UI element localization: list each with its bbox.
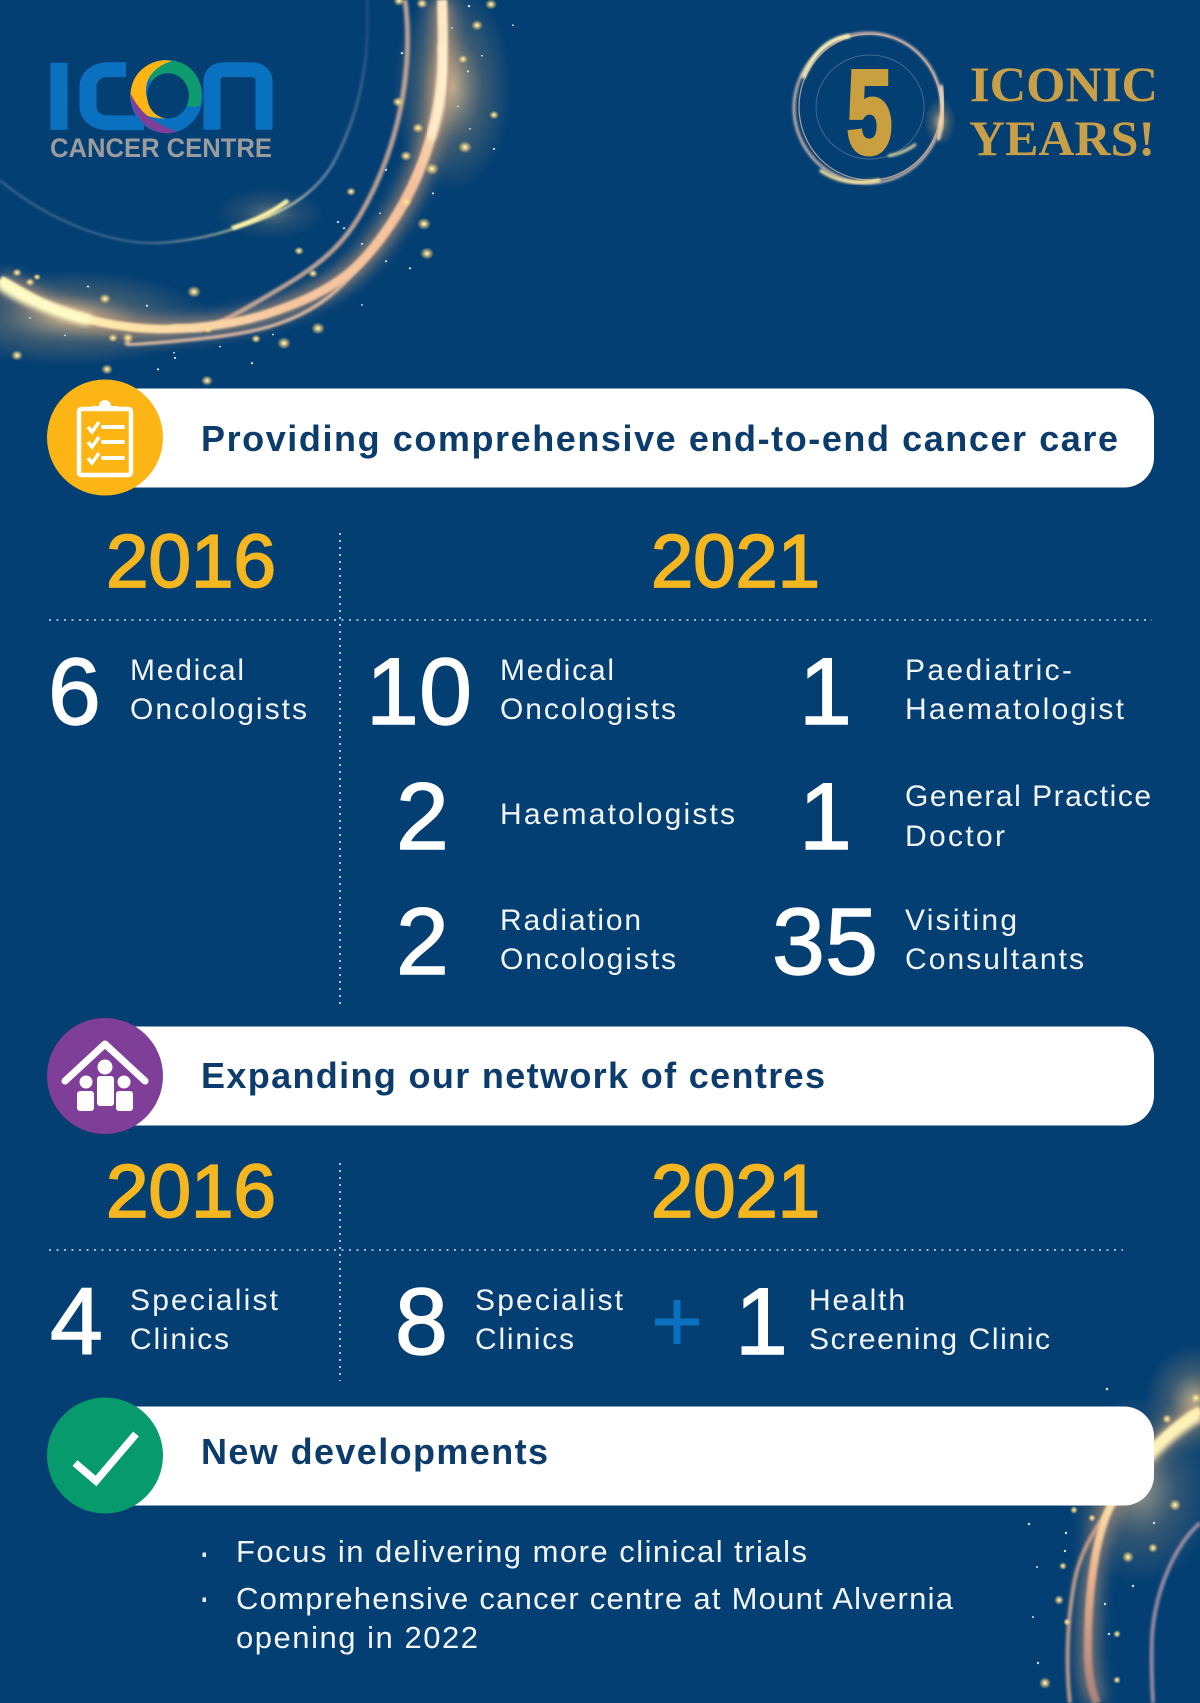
stat: 1 paediatric-haematologist: 1 [799, 639, 852, 745]
logo caption: CANCER CENTRE [50, 133, 272, 163]
section 2 header [47, 1018, 1154, 1134]
stat: 8 specialist clinics: Clinics [475, 1323, 574, 1356]
bullet 1: Focus in delivering more clinical trials [236, 1534, 807, 1569]
year 2021: 2021 [651, 519, 820, 603]
stat: 10 medical oncologists: 10 [366, 639, 472, 745]
section 3 header [47, 1398, 1154, 1514]
stat: 6 medical oncologists: 6 [48, 639, 101, 745]
stat: 8 specialist clinics: 8 [395, 1269, 448, 1375]
stat: 2 haematologists [396, 764, 735, 870]
stat: 2 haematologists: 2 [396, 764, 449, 870]
stat: 4 specialist clinics: Clinics [130, 1323, 229, 1356]
bullet 2: Comprehensive cancer centre at Mount Alvernia [236, 1581, 954, 1616]
stat: 2 radiation oncologists: Radiation [500, 904, 641, 937]
section 1 table [48, 519, 1152, 1005]
badge caption line 2: YEARS! [969, 110, 1155, 166]
heading: Providing comprehensive end-to-end cancer care [201, 418, 1118, 459]
heading: New developments [201, 1431, 548, 1472]
plus sign [655, 1300, 699, 1344]
stat: 10 medical oncologists: Medical [500, 654, 614, 687]
badge ring [794, 33, 956, 183]
stat: 1 general practice doctor: 1 [799, 764, 852, 870]
header pill [105, 388, 1154, 488]
stat: 1 paediatric-haematologist: Haematologist [905, 693, 1125, 726]
badge numeral: 5 [847, 47, 892, 179]
stat: 1 general practice doctor: General Practice [905, 780, 1151, 813]
logo: Icon Cancer Centre [50, 60, 272, 163]
stat: 2 haematologists: Haematologists [500, 798, 735, 831]
header pill [105, 1406, 1154, 1506]
stat: 8 specialist clinics [395, 1269, 624, 1375]
section 2 table [49, 1149, 1123, 1381]
stat: 1 health screening clinic: Health [809, 1284, 905, 1317]
heading: Expanding our network of centres [201, 1055, 825, 1096]
bullet list: new developments [202, 1534, 954, 1655]
stat: 1 paediatric-haematologist: Paediatric- [905, 654, 1072, 687]
stat: 2 radiation oncologists: Oncologists [500, 943, 676, 976]
stat: 35 visiting consultants: Visiting [905, 904, 1017, 937]
decorative light rings top left [0, 0, 514, 386]
icon: clipboard [47, 380, 163, 496]
stat: 6 medical oncologists: Medical [130, 654, 244, 687]
bullet 2: opening in 2022 [236, 1620, 478, 1655]
stat: 1 health screening clinic: 1 [735, 1269, 788, 1375]
stat: 4 specialist clinics: 4 [50, 1269, 103, 1375]
stat: 1 general practice doctor: Doctor [905, 820, 1005, 853]
stat: 1 general practice doctor [799, 764, 1151, 870]
stat: 10 medical oncologists: Oncologists [500, 693, 676, 726]
badge caption line 1: ICONIC [970, 56, 1158, 112]
stat: 1 health screening clinic [735, 1269, 1050, 1375]
stat: 10 medical oncologists [366, 639, 676, 745]
year 2016: 2016 [106, 519, 276, 603]
stat: 35 visiting consultants [772, 889, 1084, 995]
stat: 8 specialist clinics: Specialist [475, 1284, 624, 1317]
stat: 1 paediatric-haematologist [799, 639, 1125, 745]
stat: 2 radiation oncologists [396, 889, 676, 995]
stat: 2 radiation oncologists: 2 [396, 889, 449, 995]
icon: house with family [47, 1018, 163, 1134]
year 2016: 2016 [106, 1149, 276, 1233]
logo graphic [50, 60, 264, 133]
stat: 35 visiting consultants: Consultants [905, 943, 1084, 976]
stat: 35 visiting consultants: 35 [772, 889, 878, 995]
stat: 4 specialist clinics: Specialist [130, 1284, 279, 1317]
stat: 6 medical oncologists [48, 639, 307, 745]
stat: 6 medical oncologists: Oncologists [130, 693, 307, 726]
decorative light rings bottom right [1028, 1345, 1200, 1703]
year 2021: 2021 [651, 1149, 820, 1233]
sparkles [11, 0, 499, 386]
bullet 2 [202, 1581, 954, 1655]
stat: 1 health screening clinic: Screening Clinic [809, 1323, 1050, 1356]
section 1 header [47, 380, 1154, 496]
header pill [105, 1026, 1154, 1126]
stat: 4 specialist clinics [50, 1269, 279, 1375]
badge: 5 iconic years [794, 33, 1158, 183]
icon: check mark [47, 1398, 163, 1514]
